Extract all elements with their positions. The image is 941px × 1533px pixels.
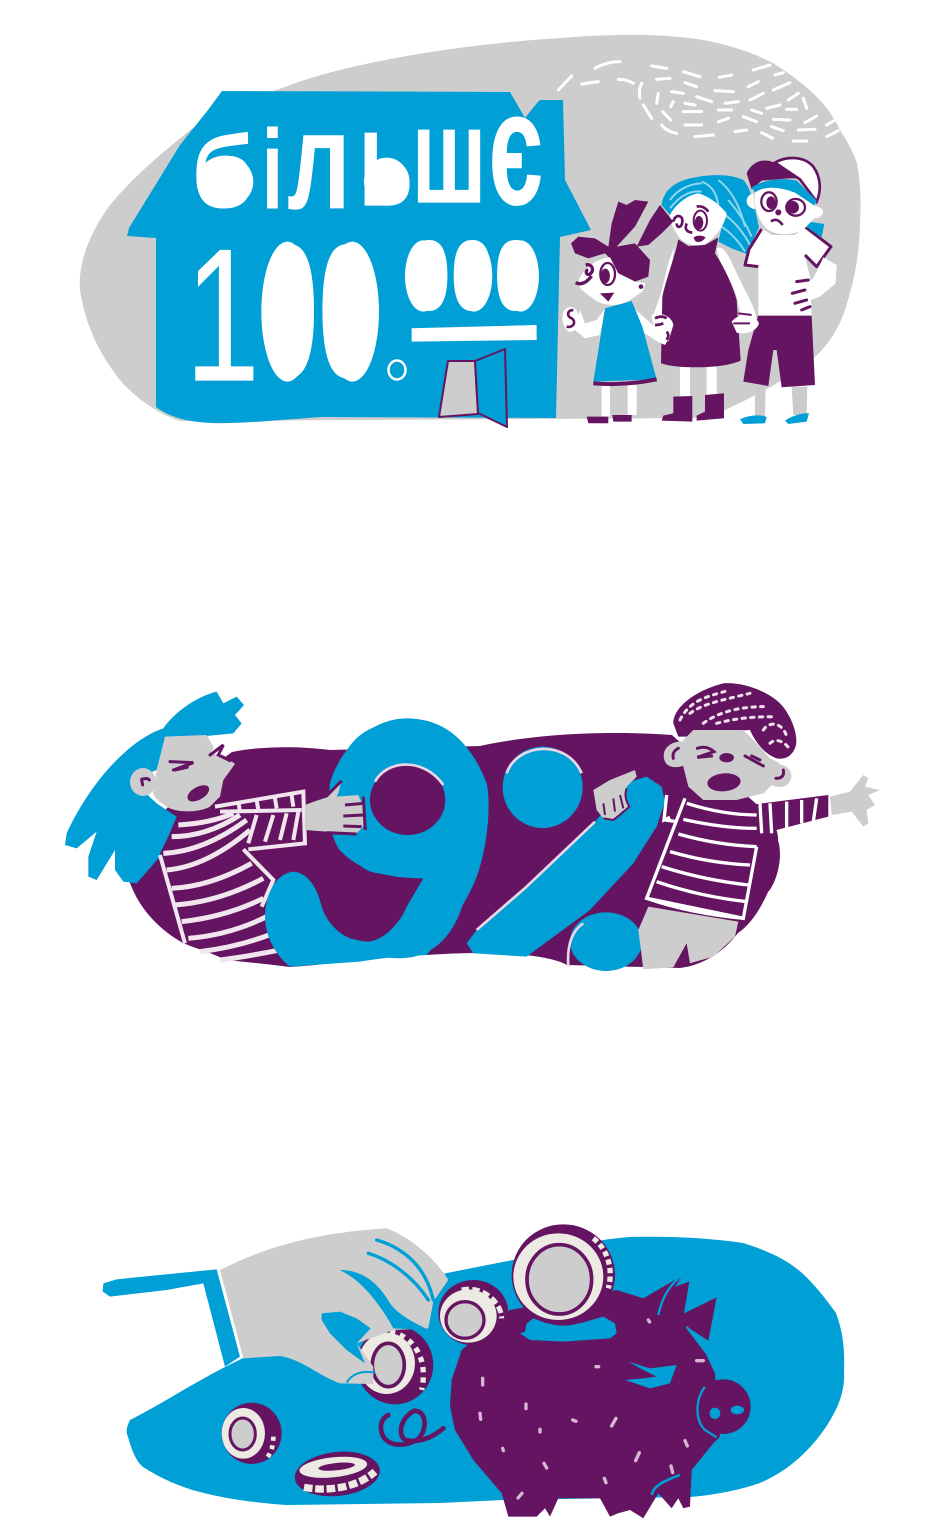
number text: 100: 1 [185,210,260,422]
gap between fingers [322,1312,371,1363]
left child hair [65,692,244,883]
mother boots [662,393,724,422]
right child hand on percent [593,770,637,820]
coin slot [520,1317,617,1342]
heading text: більше: є [488,56,543,239]
numeral 9: 9 [325,653,482,1026]
panel: hand dropping coins into piggy bank [103,1224,844,1518]
coin: flat on ground [293,1448,382,1500]
right child face [683,730,780,800]
pig ear accents [658,1275,707,1353]
boy cap [747,158,820,202]
blue background blob [127,1237,844,1505]
pig eye [625,1362,677,1388]
left child face [153,735,235,811]
boy shorts [743,315,815,387]
percent sign [467,747,665,973]
pig rear leg accent [652,1475,680,1495]
small ordinal ring [388,360,406,380]
boy hair [752,179,817,207]
right child closed eyes and mouth [673,747,784,793]
girl face [578,257,646,305]
coin: held in fingers [357,1326,433,1404]
number text: 000 with underline: 000 [407,220,537,332]
mother features [673,206,708,242]
number text: 100: 00 [260,206,377,418]
thumbnail [347,1372,375,1383]
girl arms [575,307,670,345]
percent sign: % [583,910,627,973]
panel: 9 percent with two children [65,653,880,1026]
mother hair [662,175,759,254]
door [439,349,507,427]
boy sleeve outlines [745,227,831,267]
pig snout outline [697,1387,717,1437]
pig bristles [480,1320,703,1498]
pig tail [381,1411,443,1445]
pig nostrils [710,1406,744,1419]
mother right hand [732,313,759,333]
house [127,91,591,423]
mother hand left [652,314,673,342]
girl hair [571,200,650,282]
pig snout [696,1379,751,1434]
coin: above slot [512,1224,615,1326]
panel: more than 100,000 house and family [80,35,861,427]
left child ear [130,768,156,796]
coin: lying left [222,1403,282,1464]
right child outstretched hand [830,775,880,827]
right child leg [638,907,738,969]
boy hand fingers [792,280,810,310]
mother face [670,193,727,245]
girl legs [602,385,637,417]
girl dress hem [593,379,657,384]
heading text: більше: ь [358,82,413,236]
purple background blob [130,733,780,968]
coin: mid air [438,1280,508,1345]
heading text: більше: л [287,84,351,238]
girl features [576,263,643,302]
heading text: більше: ш [412,79,487,233]
heading text: більше: і [262,106,283,233]
boy features [761,192,805,225]
mother dress [661,237,741,367]
left child hand [305,780,365,834]
sleeve cuff [103,1269,240,1367]
finger creases [368,1240,433,1300]
boy right-side hair [805,222,824,237]
right child hair [673,683,796,759]
boy legs [755,385,807,417]
girl hand left [562,307,579,332]
chimney smoke dashes [558,62,838,141]
mother arms and legs [653,245,757,397]
pig body [450,1275,720,1518]
boy shoes [740,413,809,424]
family figures [562,158,837,424]
right child ears [664,741,791,787]
grey background blob [80,35,861,421]
girl second pigtail [637,205,673,247]
boy arm [792,257,837,303]
heading text: більше [192,56,543,239]
percent highlight strokes [477,749,595,967]
right child striped sweater [647,793,828,918]
boy ears [747,193,823,218]
left child striped sweater [160,790,305,967]
girl dress [593,301,657,382]
left child closed eyes and mouth [142,745,230,805]
heading text: більше: б [192,113,255,229]
hand [220,1228,448,1384]
girl right hand fingers [655,317,668,340]
piggy bank [450,1275,751,1518]
boy face [755,188,816,234]
girl shoes [587,415,632,423]
numeral 9 [265,653,489,1026]
boy t-shirt [745,227,832,316]
number text: 100 [185,206,379,422]
9 highlight rim [375,765,443,785]
